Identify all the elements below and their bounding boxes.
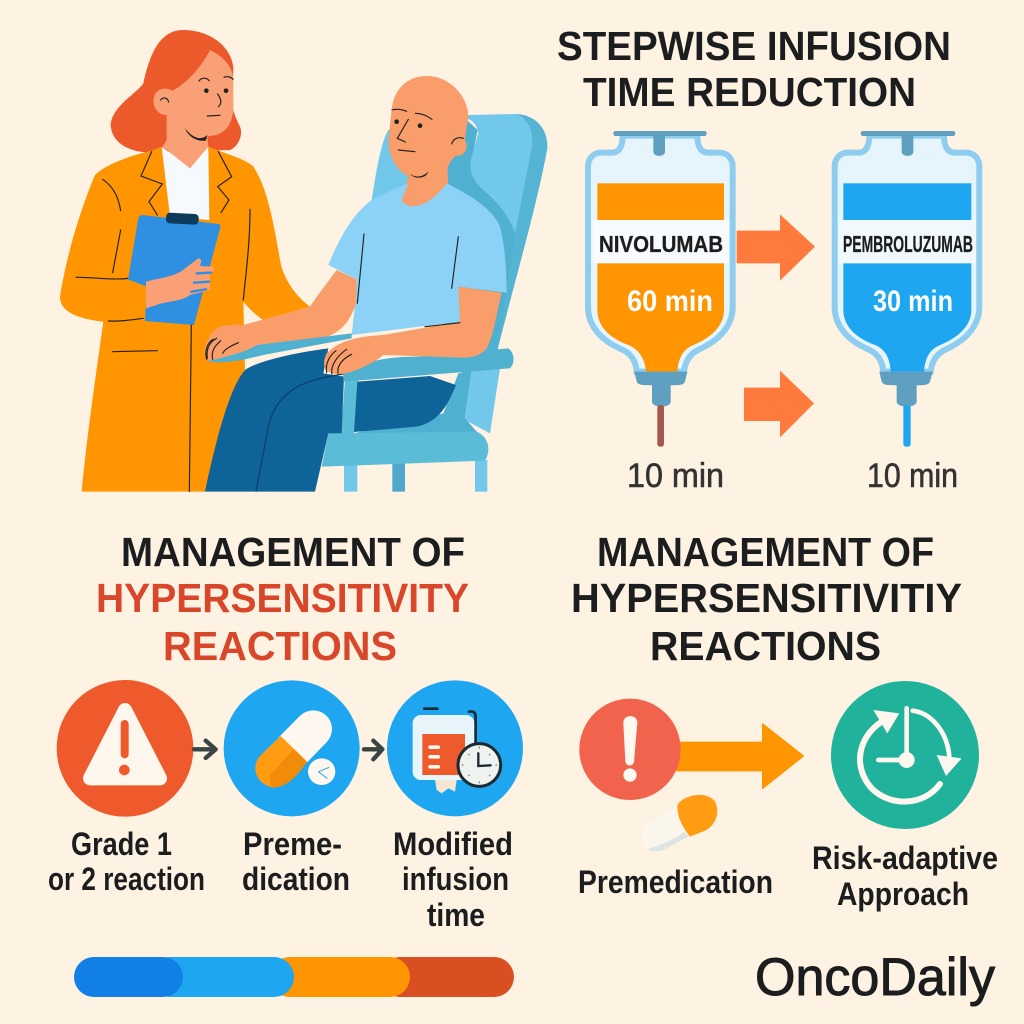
icon: exclamation: [579, 699, 681, 800]
heading: management left: REACTIONS: [163, 623, 397, 669]
bag: nivolumab: [588, 131, 733, 447]
heading: management right: REACTIONS: [650, 623, 881, 669]
label: modified infusion time: time: [427, 897, 485, 933]
icon: capsule: [224, 680, 360, 816]
patient trousers: [204, 348, 456, 492]
bag labels: 10 min: [627, 457, 724, 495]
arrow: second step: [364, 741, 382, 759]
label: risk-adaptive approach: [812, 840, 998, 912]
iv bags diagram: [588, 131, 979, 447]
colour progress bar: [74, 957, 514, 997]
chair: [322, 114, 547, 492]
title: stepwise infusion time reduction: STEPWISE INFUSION: [557, 23, 951, 69]
title: stepwise infusion time reduction: TIME REDUCTION: [583, 69, 916, 115]
bag: pembrolizumab: [835, 131, 979, 447]
heading: management right: HYPERSENSITIVITIY: [571, 575, 962, 621]
bag labels: 60 min: [627, 285, 713, 318]
left flow icons: [57, 680, 523, 817]
icon: capsule: [642, 795, 717, 852]
label: grade 1 or 2 reaction: Grade 1: [71, 826, 172, 862]
heading: management left: HYPERSENSITIVITY: [96, 575, 469, 621]
label: modified infusion time: [393, 826, 513, 933]
label: premedication: [242, 826, 350, 897]
title: stepwise infusion time reduction: [557, 23, 951, 115]
bag labels: [599, 231, 973, 495]
icon: infusion clock: [387, 680, 523, 816]
label: modified infusion time: Modified: [393, 826, 513, 862]
bag labels: NIVOLUMAB: [599, 231, 723, 257]
logo: oncodaily: OncoDaily: [755, 948, 995, 1007]
label: risk-adaptive approach: Risk-adaptive: [812, 840, 998, 876]
arrow: orange: [677, 724, 803, 788]
patient body: [205, 76, 514, 382]
right flow icons: [579, 681, 979, 852]
arrow: lower: [744, 371, 814, 437]
arrow: upper: [737, 214, 815, 281]
label: premedication: Premedication: [578, 864, 773, 900]
label: modified infusion time: infusion: [402, 861, 509, 897]
arrow: first step: [194, 741, 216, 758]
label: premedication: dication: [242, 861, 350, 897]
label: risk-adaptive approach: Approach: [837, 876, 969, 912]
bag labels: 30 min: [873, 285, 953, 318]
label: grade 1 or 2 reaction: or 2 reaction: [48, 861, 205, 897]
illustration: doctor and patient: [60, 30, 547, 492]
heading: management right: MANAGEMENT OF: [597, 529, 934, 575]
icon: risk-adaptive clock: [831, 681, 979, 829]
heading: management left: MANAGEMENT OF: [121, 529, 465, 575]
label: grade 1 or 2 reaction: [48, 826, 205, 897]
label: premedication: Preme-: [243, 826, 342, 862]
bag labels: 10 min: [867, 457, 958, 495]
heading: management left: [96, 529, 469, 669]
icon: warning: [57, 680, 193, 817]
heading: management right: [571, 529, 962, 669]
doctor: [60, 30, 310, 492]
